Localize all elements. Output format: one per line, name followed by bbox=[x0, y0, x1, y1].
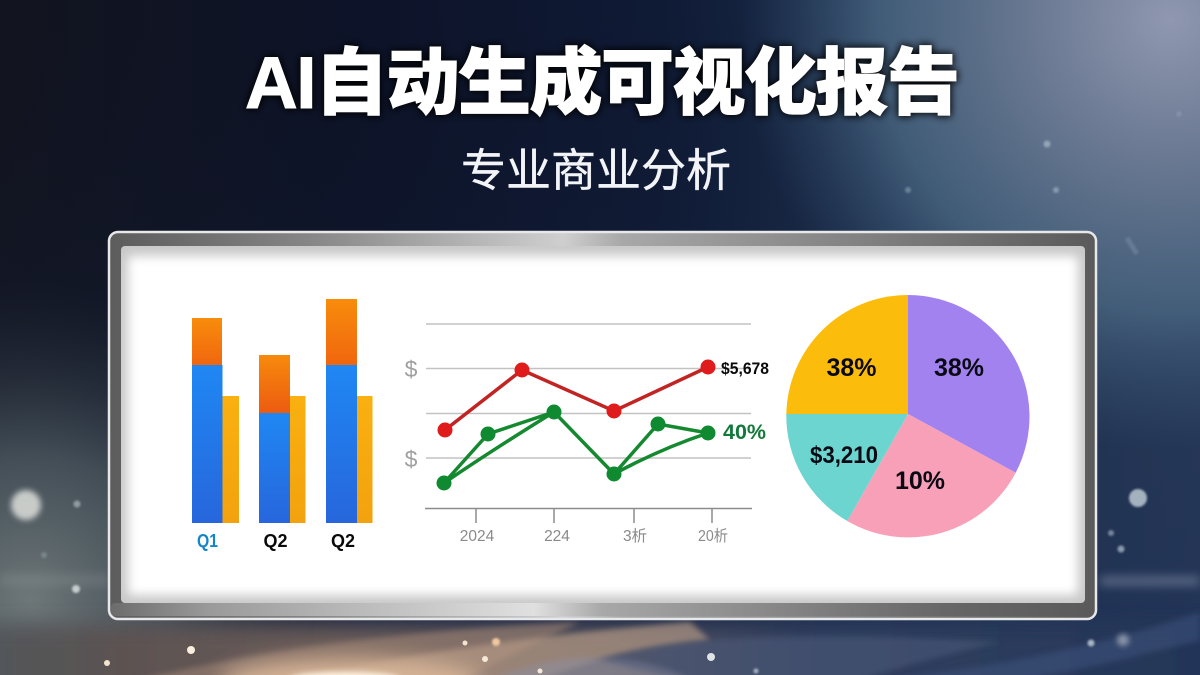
pie labels bbox=[810, 354, 984, 495]
panel: report frame bbox=[109, 232, 1096, 619]
line chart bbox=[405, 324, 769, 545]
pie chart bbox=[786, 295, 1029, 537]
bar labels bbox=[197, 531, 355, 551]
bar labels: Q2 bbox=[331, 531, 355, 551]
subtitle: 专业商业分析 bbox=[461, 145, 731, 196]
value label: $5,678 bbox=[721, 359, 769, 378]
bar group: second Q2 bbox=[259, 355, 306, 523]
percent label: 40% bbox=[723, 420, 766, 444]
bar labels: Q1 bbox=[197, 531, 218, 551]
y-axis dollar labels: $ bbox=[405, 356, 418, 382]
red series bbox=[438, 360, 716, 438]
pie labels: 10% bbox=[895, 467, 945, 495]
title: AI自动生成可视化报告 bbox=[245, 43, 960, 124]
bar group: third Q2 bbox=[326, 299, 372, 523]
bar labels: Q2 bbox=[263, 531, 288, 551]
pie labels: $3,210 bbox=[810, 442, 878, 469]
x-axis labels: 20析 bbox=[698, 527, 728, 545]
x-axis labels bbox=[460, 527, 728, 545]
bar chart bbox=[192, 299, 372, 551]
green series bbox=[436, 404, 716, 490]
title: AI自动生成可视化报告 bbox=[245, 43, 960, 124]
x-axis labels: 224 bbox=[544, 528, 570, 545]
y-axis dollar labels bbox=[405, 356, 418, 472]
pie labels: 38% bbox=[826, 354, 877, 382]
x-axis labels: 2024 bbox=[460, 528, 495, 545]
x-axis labels: 3析 bbox=[623, 527, 647, 545]
y-axis dollar labels: $ bbox=[405, 446, 418, 472]
pie slices bbox=[786, 295, 1029, 537]
bar group: first Q1 bbox=[192, 318, 239, 523]
pie labels: 38% bbox=[934, 354, 984, 382]
